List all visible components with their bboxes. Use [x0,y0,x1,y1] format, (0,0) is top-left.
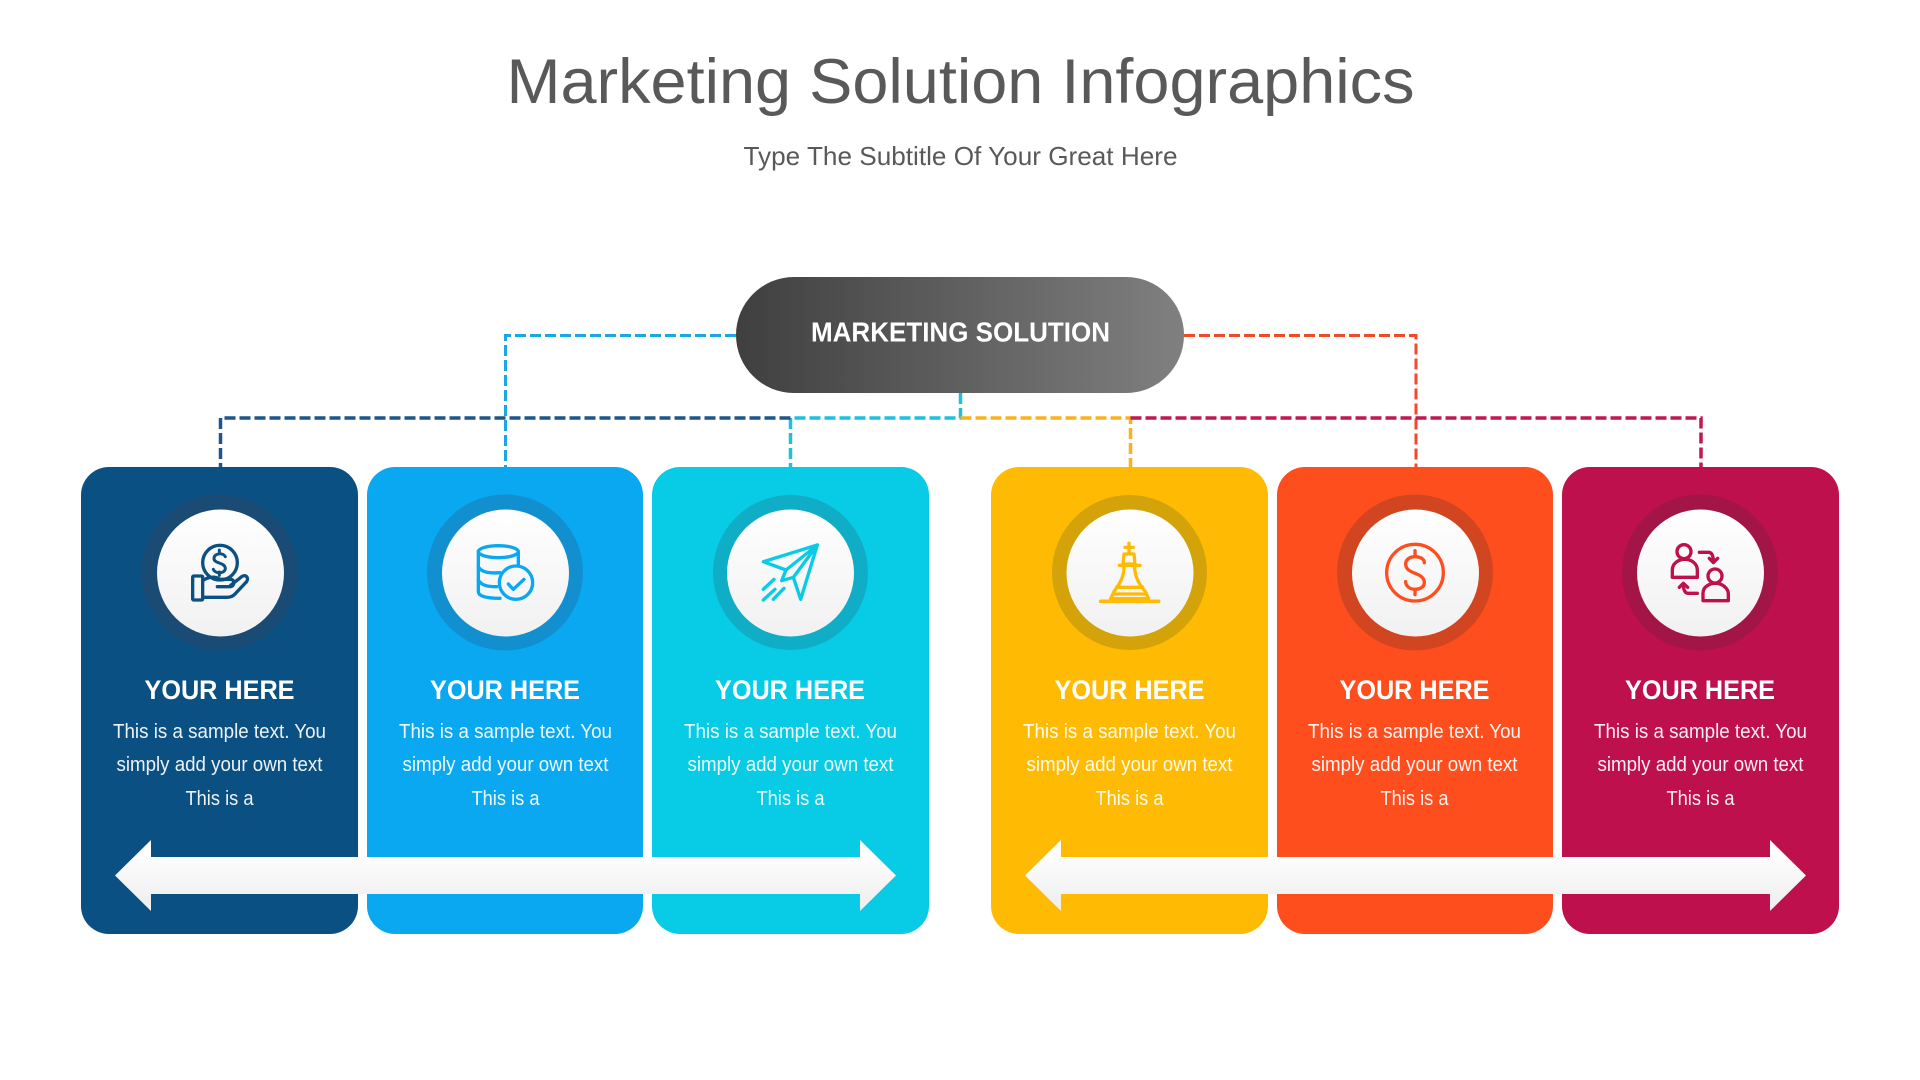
panel: card 3 cyan [652,467,929,934]
body text: This is a [1380,788,1449,810]
body text [1594,721,1807,810]
arrow: left double-headed [115,840,896,911]
body text: This is a sample text. You [1023,721,1236,743]
body text: This is a sample text. You [1594,721,1807,743]
icon: hand holding coin [193,545,247,600]
body text: This is a sample text. You [399,721,612,743]
body text [684,721,897,810]
body text: This is a [472,788,540,810]
icon: dollar coin [1387,544,1443,601]
body text: simply add your own text [1026,754,1233,776]
icon: chess king [1101,543,1159,601]
icon: paper plane [763,545,817,600]
heading: YOUR HERE [430,675,580,705]
panel: card 2 blue [367,467,643,934]
body text: This is a [1096,788,1164,810]
dashed connectors [220,336,1701,467]
panel: card 5 orange [1277,467,1553,934]
panel: card 1 navy [81,467,358,934]
icon: database check [478,546,533,599]
body text: simply add your own text [688,754,894,776]
heading: YOUR HERE [1054,675,1204,705]
central pill: marketing solution: MARKETING SOLUTION [811,316,1110,348]
body text: This is a sample text. You [684,721,897,743]
heading: YOUR HERE [1625,675,1775,705]
heading: YOUR HERE [1340,675,1490,705]
panel: card 6 crimson [1562,467,1839,934]
arrow: right double-headed [1025,840,1806,911]
title: Marketing Solution Infographics [506,47,1414,117]
central pill: marketing solution [736,277,1184,393]
body text: simply add your own text [116,754,323,776]
body text: simply add your own text [1312,754,1518,776]
panel: card 4 yellow [991,467,1268,934]
body text: This is a [756,788,825,810]
body text: This is a sample text. You [1308,721,1521,743]
heading: YOUR HERE [144,675,294,705]
body text [113,721,326,810]
body text: simply add your own text [1598,754,1804,776]
subtitle: Type The Subtitle Of Your Great Here [744,141,1178,171]
body text: This is a [186,788,254,810]
icon: people exchange [1672,545,1728,601]
body text: This is a sample text. You [113,721,326,743]
body text [399,721,612,810]
body text: simply add your own text [402,754,609,776]
heading: YOUR HERE [715,675,865,705]
body text: This is a [1666,788,1735,810]
body text [1023,721,1236,810]
body text [1308,721,1521,810]
